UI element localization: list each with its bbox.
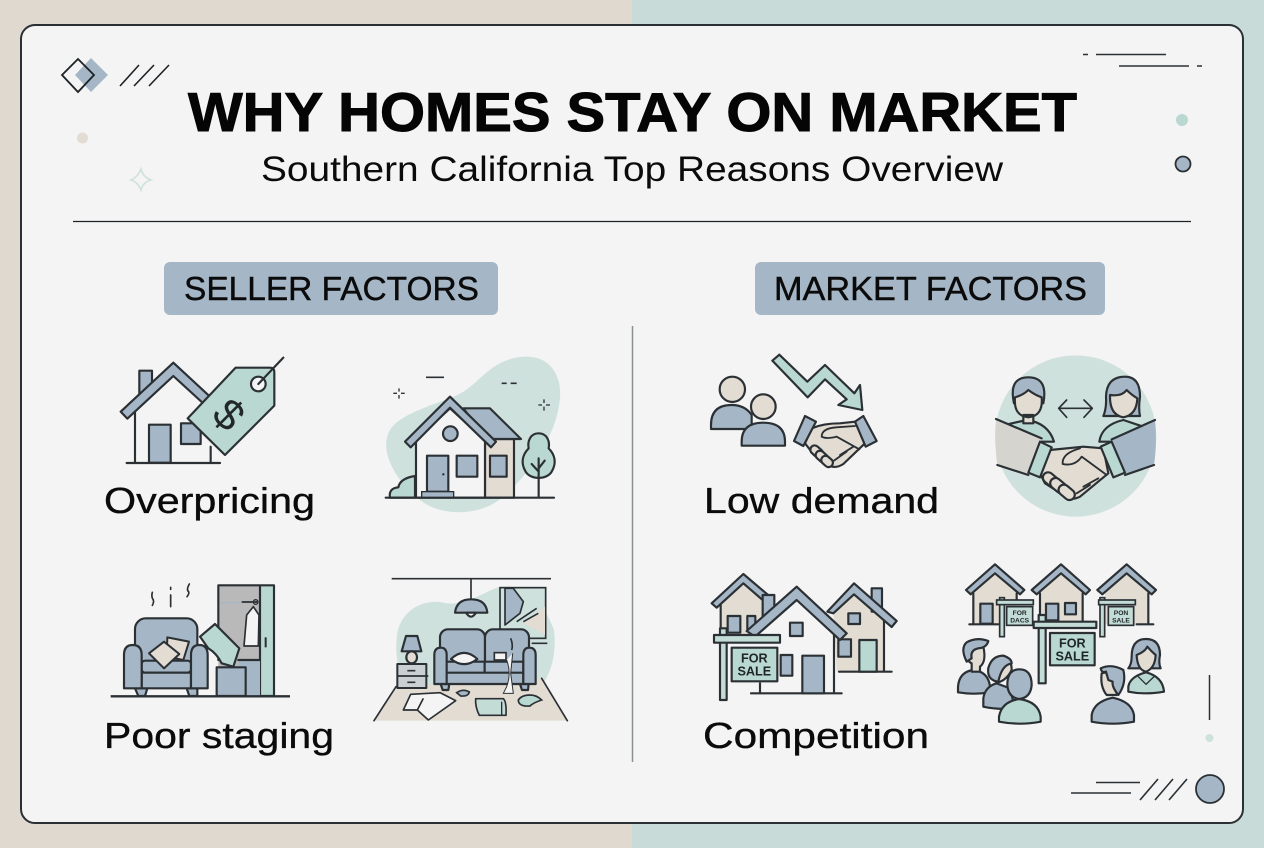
title rule <box>73 220 1191 222</box>
icon: armchair and closet <box>111 584 290 696</box>
person: right front <box>1092 666 1134 724</box>
illustration: crowd of buyers and for sale signs: FOR <box>1013 610 1027 617</box>
icon: low demand people, arrow, handshake <box>711 355 877 469</box>
background left panel <box>0 0 632 848</box>
label: overpricing: Overpricing <box>104 480 315 521</box>
background right panel <box>632 0 1264 848</box>
illustration: crowd of buyers and for sale signs: DACS <box>1010 618 1030 625</box>
decoration: top left diamonds and slashes <box>62 58 169 92</box>
decoration: teal dot <box>1176 114 1188 126</box>
label: low demand: Low demand <box>704 480 939 521</box>
decoration: blue dot <box>1176 156 1190 172</box>
illustration: crowd of buyers and for sale signs: PON <box>1114 610 1128 617</box>
illustration: suburban house <box>386 357 560 512</box>
heading: market factors <box>755 262 1105 315</box>
label: competition: Competition <box>703 715 929 756</box>
illustration: crowd of buyers and for sale signs: SALE <box>1055 649 1089 663</box>
illustration: crowd of buyers and for sale signs: FOR <box>1059 637 1086 651</box>
illustration: crowd of buyers and for sale signs: SALE <box>1112 618 1130 625</box>
illustration: buyer and seller handshake <box>995 355 1156 517</box>
icon: competing houses with for sale sign: SALE <box>737 664 771 678</box>
heading: seller factors: SELLER FACTORS <box>184 270 479 307</box>
illustration: crowd of buyers and for sale signs <box>958 564 1164 724</box>
person: left middle <box>983 656 1015 709</box>
person: right woman <box>1128 639 1164 693</box>
label: poor staging: Poor staging <box>104 715 334 756</box>
icon: competing houses with for sale sign: FOR <box>741 651 768 665</box>
icon: house with price tag: $ <box>203 390 254 441</box>
illustration: messy living room <box>374 579 567 721</box>
person: left back <box>958 639 990 694</box>
heading: seller factors <box>164 262 498 315</box>
decoration: sparkle <box>131 169 151 190</box>
person: left front <box>999 669 1041 724</box>
center divider <box>632 326 634 762</box>
icon: house with price tag <box>121 358 283 463</box>
decoration: beige dot <box>77 132 88 144</box>
title: WHY HOMES STAY ON MARKET <box>188 81 1077 143</box>
decoration: right vertical line and dot <box>1206 675 1214 742</box>
decoration: top right lines <box>1083 54 1202 66</box>
decoration: bottom right lines and circle <box>1071 775 1224 803</box>
subtitle: Southern California Top Reasons Overview <box>261 150 1004 189</box>
heading: market factors: MARKET FACTORS <box>774 270 1087 307</box>
icon: competing houses with for sale sign <box>712 574 897 700</box>
